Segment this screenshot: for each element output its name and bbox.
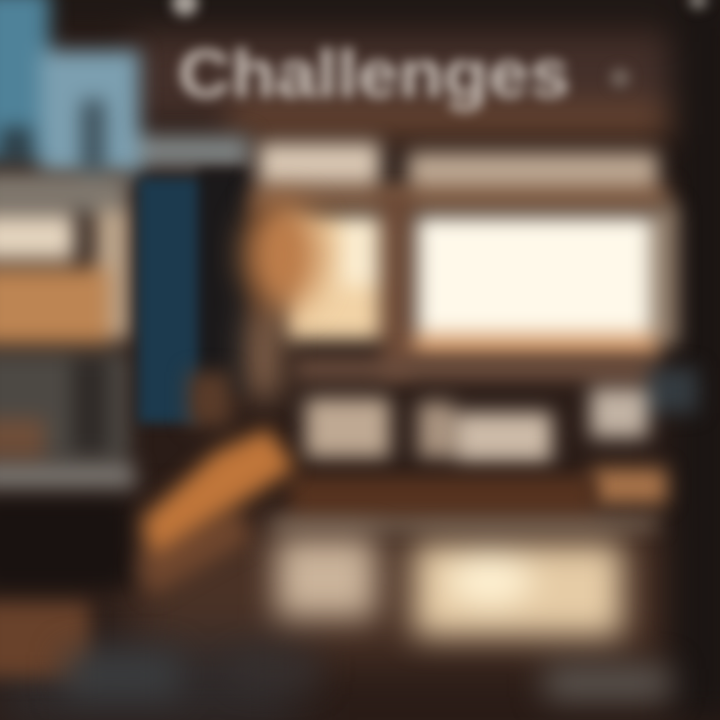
small decorative marks at top edge	[172, 0, 707, 88]
figure head and shoulder	[244, 200, 320, 397]
upper window strip	[250, 142, 670, 212]
table items	[295, 358, 698, 504]
left wall bands	[0, 172, 135, 677]
bright windows	[284, 195, 678, 375]
table band	[272, 476, 657, 530]
blue and dark columns	[138, 170, 248, 423]
lower floor glow	[0, 520, 670, 720]
upper left blue window	[0, 0, 250, 200]
title: blurred heading: Challenges	[178, 36, 570, 112]
floor reflections	[64, 538, 670, 698]
orange diagonal arm	[138, 372, 296, 596]
